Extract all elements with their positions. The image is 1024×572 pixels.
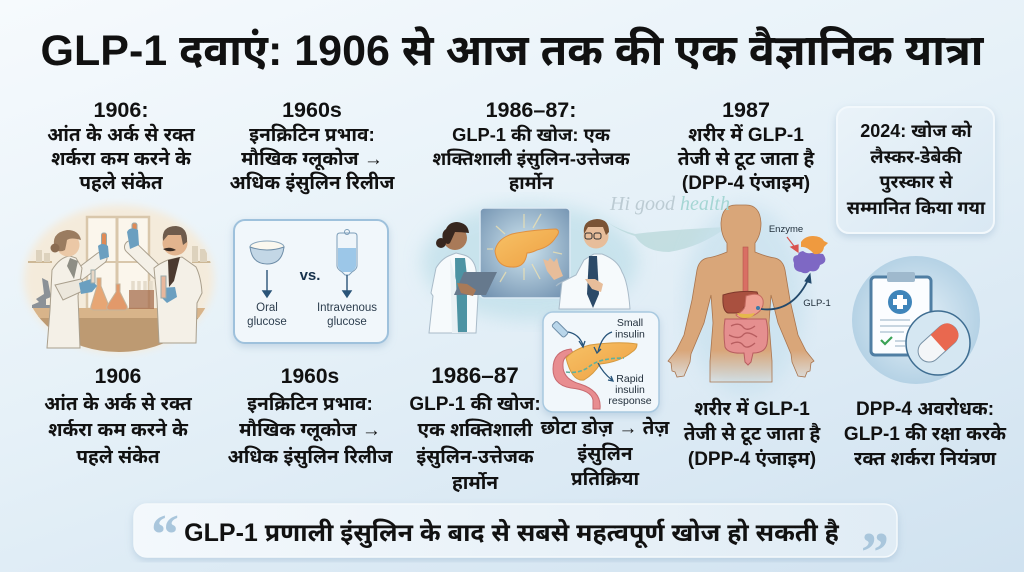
text: 1960s bottom: इनक्रिटिन प्रभाव: — [247, 394, 373, 414]
text: 1906 bottom: पहले संकेत — [76, 446, 160, 468]
text: 1986-87 top: 1986–87: — [486, 98, 576, 122]
text: 1986-87 bottom: इंसुलिन-उत्तेजक — [416, 446, 534, 468]
text: small dose rapid response: प्रतिक्रिया — [571, 469, 639, 490]
text: oral glucose: Oral — [256, 302, 278, 314]
text: 1987 top: शरीर में GLP-1 — [688, 125, 804, 146]
text: 1987 top: (DPP-4 एंजाइम) — [682, 173, 810, 194]
text: 1960s top: 1960s — [282, 98, 342, 122]
text: 1987 bottom: तेजी से टूट जाता है — [684, 424, 820, 445]
text: 1960s top: इनक्रिटिन प्रभाव: — [249, 125, 375, 146]
text: quote: GLP-1 प्रणाली इंसुलिन के बाद से सबसे महत्वपूर्ण खोज हो सकती है — [184, 519, 839, 547]
title: GLP-1 दवाएं: 1906 से आज तक की एक वैज्ञानिक यात्रा — [41, 27, 983, 75]
text: 1960s bottom — [228, 365, 393, 468]
text: 2024 card: सम्मानित किया गया — [847, 198, 985, 218]
text: 1906 top: आंत के अर्क से रक्त — [47, 125, 195, 146]
opening quote mark: “ — [151, 504, 179, 566]
text: 1906 top: पहले संकेत — [79, 173, 163, 194]
text: 2024 card: लैस्कर-डेबेकी — [870, 146, 962, 166]
icon: enzyme blob: Enzyme — [769, 224, 803, 235]
scientist right — [127, 223, 202, 343]
illustration: scientists in a lab — [24, 205, 216, 356]
text: small dose rapid response: छोटा डोज़ → तेज़ — [541, 418, 669, 439]
text: intravenous glucose: glucose — [327, 316, 367, 328]
text: DPP-4 inhibitor: रक्त शर्करा नियंत्रण — [854, 449, 996, 470]
illustration: human body with digestive system — [668, 205, 814, 395]
scientist woman with tablet — [429, 222, 497, 333]
text: 1906 top: 1906: — [94, 98, 148, 122]
card: 2024 award — [837, 107, 994, 233]
text: 1960s top — [230, 98, 395, 194]
text: 1986-87 top: हार्मोन — [509, 172, 553, 193]
text: DPP-4 inhibitor: GLP-1 की रक्षा करके — [844, 424, 1006, 445]
icon: enzyme blob — [769, 224, 828, 273]
text: 2024 card — [846, 120, 986, 218]
text: 1906 bottom: 1906 — [95, 365, 141, 388]
text: 1906 top — [47, 98, 196, 194]
text: 1986-87 bottom — [409, 363, 541, 494]
quote bar — [134, 504, 897, 557]
text: 1960s top: अधिक इंसुलिन रिलीज — [230, 173, 394, 194]
scientist man presenting — [543, 219, 630, 309]
text: 1987 top: तेजी से टूट जाता है — [678, 149, 814, 170]
text: 1986-87 bottom: GLP-1 की खोज: — [409, 394, 541, 414]
text: 2024 card: 2024: खोज को — [860, 121, 972, 141]
text: 2024 card: पुरस्कार से — [879, 172, 953, 192]
text: 1986-87 bottom: हार्मोन — [452, 473, 498, 494]
inset: small insulin rapid response: insulin — [615, 384, 645, 396]
panel: oral vs intravenous glucose — [234, 220, 388, 343]
text: 1960s top: मौखिक ग्लूकोज → — [241, 149, 383, 170]
text: DPP-4 inhibitor: DPP-4 अवरोधक: — [856, 399, 994, 420]
text: 1986-87 top: शक्तिशाली इंसुलिन-उत्तेजक — [432, 148, 630, 169]
inset: small insulin rapid response — [543, 312, 659, 412]
watermark swoosh — [607, 222, 727, 252]
inset: small insulin rapid response: response — [608, 395, 652, 407]
text: 1906 bottom: आंत के अर्क से रक्त — [44, 394, 192, 414]
watermark: Hi good health — [610, 193, 730, 215]
icon: IV bag — [337, 230, 357, 275]
text: 1906 bottom: शर्करा कम करने के — [48, 420, 188, 441]
icon: clipboard and pill — [852, 256, 980, 384]
text: 1986-87 bottom: एक शक्तिशाली — [417, 420, 533, 441]
text: 1906 bottom — [44, 365, 192, 468]
text: DPP-4 inhibitor — [844, 398, 1006, 470]
inset: small insulin rapid response: Small — [617, 317, 643, 329]
text: 1960s bottom: मौखिक ग्लूकोज → — [239, 420, 381, 441]
arrow: GLP-1 to enzyme: GLP-1 — [803, 298, 831, 309]
text: 1987 bottom: शरीर में GLP-1 — [694, 399, 810, 420]
icon: glucose bowl — [250, 241, 284, 264]
text: 1987 bottom — [684, 398, 821, 470]
text: 1986-87 top: GLP-1 की खोज: एक — [452, 124, 610, 145]
text: 1960s bottom: अधिक इंसुलिन रिलीज — [228, 446, 392, 468]
text: 1987 bottom: (DPP-4 एंजाइम) — [688, 449, 816, 470]
inset: small insulin rapid response: insulin — [615, 328, 645, 340]
text: small dose rapid response — [540, 416, 670, 490]
scientist left — [47, 230, 109, 348]
text: 1960s bottom: 1960s — [281, 365, 339, 388]
inset: small insulin rapid response: Rapid — [616, 373, 644, 385]
text: small dose rapid response: इंसुलिन — [577, 444, 633, 464]
text: 1987 top — [678, 98, 815, 194]
text: intravenous glucose: Intravenous — [317, 302, 377, 314]
arrow: GLP-1 to enzyme — [756, 274, 831, 310]
text: 1906 top: शर्करा कम करने के — [51, 149, 191, 170]
arrow: intravenous — [343, 275, 351, 297]
arrow: oral — [263, 270, 271, 297]
text: oral glucose: glucose — [247, 316, 287, 328]
text: 1986-87 bottom: 1986–87 — [431, 363, 519, 388]
illustration: researchers presenting pancreas — [422, 204, 727, 333]
text: 1986-87 top — [432, 98, 630, 193]
text: vs: vs. — [300, 267, 320, 284]
text: 1987 top: 1987 — [722, 98, 770, 122]
illustrations layer — [22, 106, 998, 562]
